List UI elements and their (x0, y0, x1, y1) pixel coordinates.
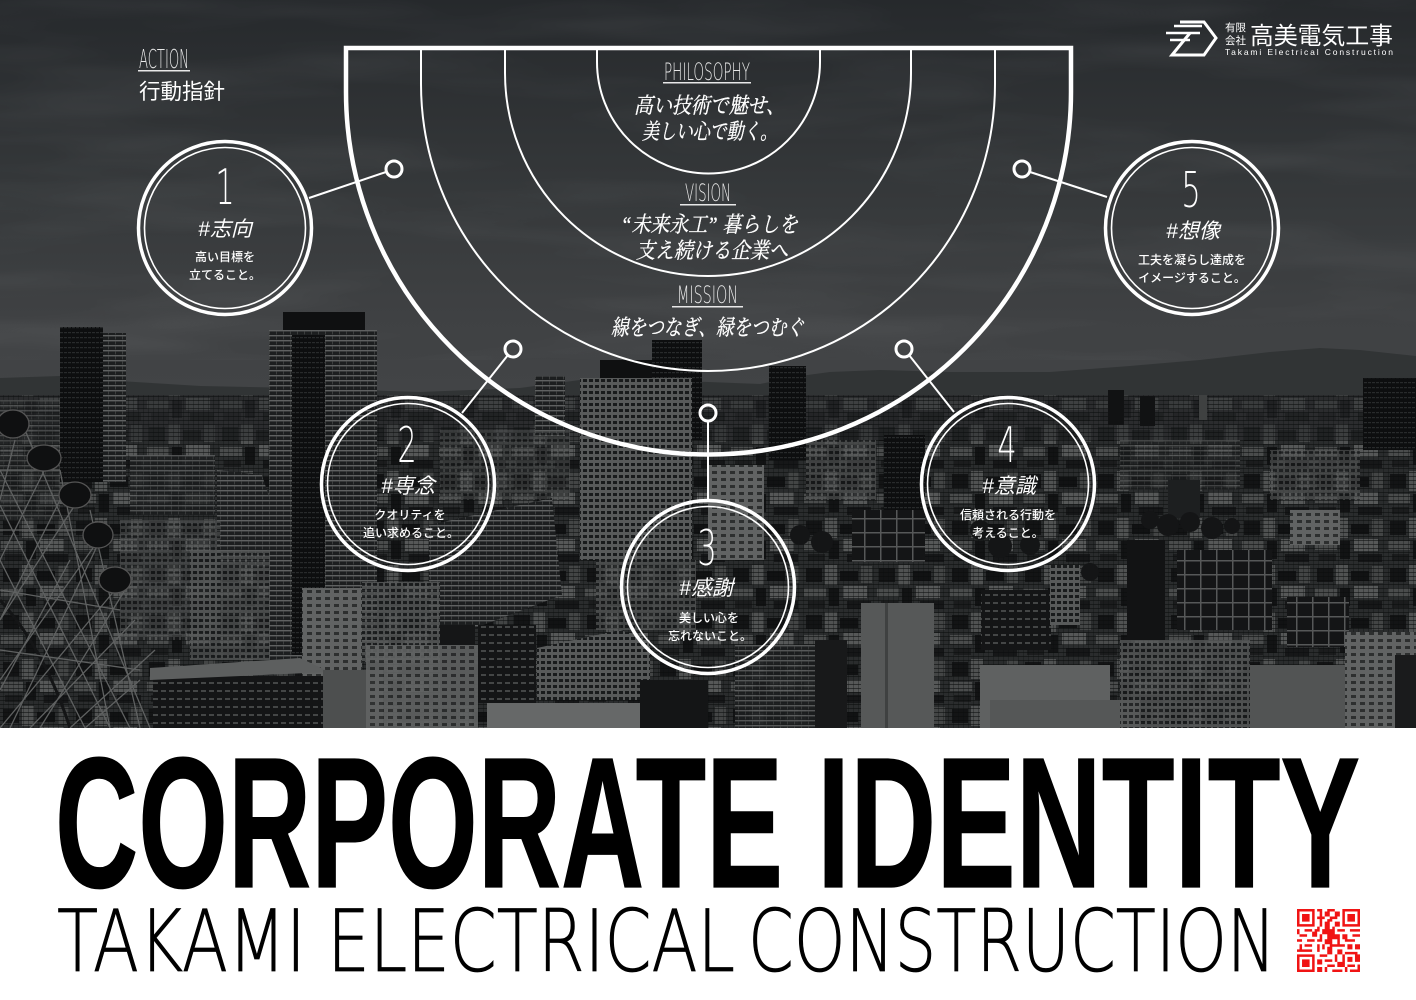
outer half circle frame (346, 48, 1071, 454)
action 5: 想像: イメージすること。 (1138, 271, 1246, 285)
action 5: 想像: 工夫を凝らし達成を (1138, 252, 1246, 267)
company logo: 有限 (1225, 21, 1246, 34)
action 4: 意識: #意識 (982, 475, 1039, 498)
vision text (621, 179, 799, 263)
action 2: 専念: クオリティを (374, 508, 446, 522)
action 5: 想像 (1014, 142, 1278, 314)
philosophy text (634, 58, 785, 144)
action 1: 志向: 1 (215, 158, 235, 216)
action 4: 意識: 4 (997, 416, 1017, 474)
mission text: MISSION (677, 281, 738, 309)
action 5: 想像: #想像 (1166, 220, 1222, 243)
action 3: 感謝: #感謝 (679, 577, 736, 600)
white title band (0, 728, 1416, 1000)
action 4: 意識: 信頼される行動を (960, 507, 1056, 522)
vision ring (505, 50, 911, 276)
action 3: 感謝 (622, 405, 794, 674)
action 1: 志向 (138, 142, 402, 314)
action 3: 感謝: 忘れないこと。 (668, 629, 752, 643)
mission ring (421, 50, 995, 371)
mission text: 線をつなぎ、緑をつむぐ (611, 315, 805, 340)
vision text: 支え続ける企業へ (636, 238, 788, 263)
mission text (611, 281, 805, 340)
action 3: 感謝: 美しい心を (679, 611, 739, 625)
company logo: Takami Electrical Construction (1225, 47, 1393, 57)
vision text: “未来永工” 暮らしを (621, 212, 799, 237)
photo background: city skyline (0, 0, 1416, 728)
philosophy text: PHILOSOPHY (664, 58, 750, 86)
heading: action: ACTION (139, 45, 189, 75)
heading: action: 行動指針 (139, 80, 225, 104)
company logo (1166, 21, 1393, 57)
company logo: 会社 (1225, 34, 1246, 47)
philosophy text: 美しい心で動く。 (642, 119, 777, 144)
action 1: 志向: 立てること。 (189, 268, 261, 282)
action 3: 感謝: 3 (697, 519, 717, 577)
action 2: 専念: 追い求めること。 (363, 525, 459, 540)
action 4: 意識 (896, 341, 1094, 570)
vision text: VISION (685, 179, 731, 207)
title: corporate: CORPORATE (55, 720, 783, 927)
qr code (1297, 909, 1360, 972)
action 2: 専念: 2 (397, 416, 417, 474)
action 2: 専念: #専念 (381, 475, 438, 498)
heading: action (138, 45, 225, 104)
company logo: 高美電気工事 (1250, 23, 1393, 50)
philosophy text: 高い技術で魅せ、 (634, 93, 785, 118)
half-circle diagram: philosophy, vision, mission (346, 48, 1071, 454)
ferris wheel (0, 410, 155, 728)
action 1: 志向: #志向 (198, 218, 254, 241)
philosophy ring (597, 50, 820, 174)
action 5: 想像: 5 (1181, 161, 1201, 219)
logo mark (1166, 22, 1216, 55)
action 4: 意識: 考えること。 (972, 526, 1044, 540)
subtitle: takami electrical: TAKAMI ELECTRICAL (57, 892, 735, 992)
action 2: 専念 (322, 341, 521, 570)
action 1: 志向: 高い目標を (195, 249, 255, 264)
